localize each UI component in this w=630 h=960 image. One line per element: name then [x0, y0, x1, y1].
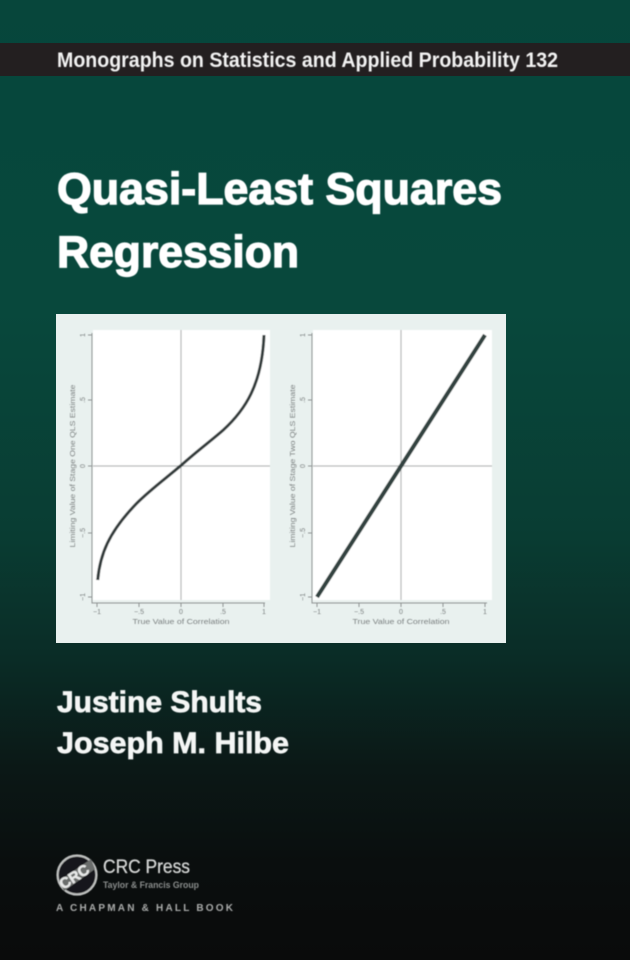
chart: stage two estimate: 0 — [300, 464, 307, 468]
chart: stage one estimate: 0 — [80, 464, 87, 468]
chart: stage two estimate: 0 — [399, 609, 403, 616]
chart: stage one estimate: −.5 — [134, 609, 144, 616]
chart: stage two estimate: True Value of Correlation — [352, 619, 450, 626]
chart: stage two estimate: 1 — [300, 333, 307, 337]
chart: stage one estimate: −1 — [80, 593, 87, 601]
publisher group: Taylor & Francis Group — [103, 880, 199, 891]
imprint line: A CHAPMAN & HALL BOOK — [56, 903, 234, 914]
publisher logo — [56, 856, 234, 914]
chart: stage two estimate: .5 — [440, 609, 446, 616]
chart: stage two estimate: −1 — [300, 593, 307, 601]
title — [57, 165, 502, 277]
chart: stage one estimate: 1 — [262, 609, 266, 616]
chart: stage two estimate: −.5 — [300, 528, 307, 538]
chart: stage one estimate: −.5 — [80, 528, 87, 538]
chart: stage two estimate — [290, 330, 492, 626]
chart: stage two estimate: .5 — [300, 397, 307, 403]
title: Quasi-Least Squares — [57, 165, 502, 214]
title: Regression — [57, 228, 299, 277]
publisher name: CRC Press — [103, 857, 190, 878]
chart: stage two estimate: 1 — [483, 609, 487, 616]
chart: stage one estimate: .5 — [80, 397, 87, 403]
chart: stage one estimate: True Value of Correlation — [132, 619, 230, 626]
chart: stage one estimate: 0 — [179, 609, 183, 616]
series banner: Monographs on Statistics and Applied Probability 132 — [57, 48, 558, 72]
chart: stage one estimate — [70, 330, 270, 626]
series banner — [0, 43, 630, 76]
authors: Joseph M. Hilbe — [57, 727, 289, 760]
chart: stage two estimate: Limiting Value of Stage Two QLS Estimate — [290, 384, 297, 548]
chart: stage one estimate: −1 — [93, 609, 101, 616]
authors: Justine Shults — [57, 686, 262, 719]
icon: CRC roundel: CRC — [56, 861, 93, 893]
chart: stage one estimate: 1 — [80, 333, 87, 337]
chart: stage two estimate: −.5 — [354, 609, 364, 616]
chart: stage one estimate: Limiting Value of Stage One QLS Estimate — [70, 384, 77, 548]
chart: stage one estimate: .5 — [220, 609, 226, 616]
chart: stage two estimate: −1 — [313, 609, 321, 616]
panel: cover figure — [56, 314, 506, 643]
authors — [57, 686, 289, 760]
